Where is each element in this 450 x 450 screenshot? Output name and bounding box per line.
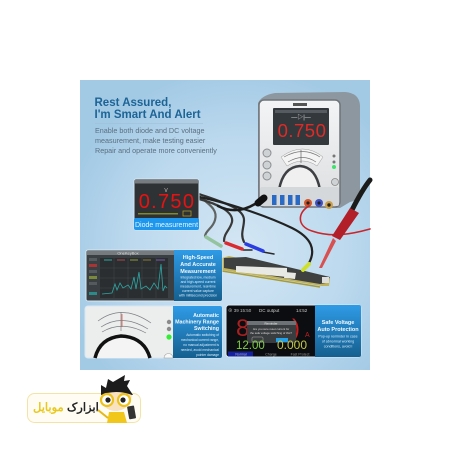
warning dialog: the safe voltage switching of this? xyxy=(250,331,292,335)
heading xyxy=(94,97,201,121)
card: high-speed measurement: High-Speed xyxy=(183,255,213,261)
card: safe voltage protection: conditions, avoid l xyxy=(324,344,352,348)
card: automatic range switching: needed, avoid mechanical xyxy=(181,348,219,352)
warning dialog: Are you sure reset current for xyxy=(253,327,289,331)
red clip xyxy=(226,243,242,249)
card: high-speed measurement: And Accurate xyxy=(180,262,216,268)
analog scale xyxy=(98,312,151,333)
card: safe voltage protection: Charge xyxy=(265,352,277,356)
reading: 0.750 xyxy=(139,191,195,213)
indicator lights xyxy=(332,154,338,186)
indicator lights xyxy=(166,320,172,340)
phone xyxy=(127,405,136,419)
mascot xyxy=(98,375,136,423)
display: —▷|— xyxy=(291,114,311,121)
card: automatic range switching: Automatic xyxy=(193,313,219,319)
card: automatic range switching: Machinery Range xyxy=(175,320,219,326)
heading: Rest Assured, xyxy=(94,97,171,109)
card: automatic range switching: pointer damage xyxy=(196,353,219,357)
text block: description xyxy=(95,126,217,155)
screen title: ⊕ 39 15:50 xyxy=(228,308,252,313)
front port strip xyxy=(260,187,339,206)
brand label xyxy=(293,103,307,106)
blue clip xyxy=(246,244,263,251)
hair xyxy=(101,375,133,395)
main black cable xyxy=(199,197,312,263)
card: high-speed measurement: Integrated low, medium xyxy=(180,276,216,280)
card: high-speed measurement: Measurement xyxy=(180,269,216,275)
text block: description: Enable both diode and DC voltage xyxy=(95,126,204,135)
red needle xyxy=(121,314,123,327)
card: safe voltage protection: Pop-up reminder in case xyxy=(318,334,358,338)
caption strip xyxy=(134,218,199,230)
card: diode measurement: V xyxy=(164,188,168,194)
blue text panel xyxy=(315,305,361,357)
left knobs xyxy=(263,149,271,180)
face xyxy=(101,392,132,411)
display xyxy=(273,108,329,145)
black dial arch xyxy=(95,336,150,358)
current chart xyxy=(100,258,168,298)
terminals xyxy=(304,199,333,209)
card: safe voltage protection xyxy=(226,305,361,357)
card: safe voltage protection: 0.000 xyxy=(277,338,307,352)
card: safe voltage protection: of abnormal working xyxy=(322,340,354,344)
usb ports xyxy=(272,195,300,205)
warning dialog: Reminder xyxy=(264,322,278,326)
card: safe voltage protection: Auto Protection xyxy=(317,327,359,333)
device: multimeter power supply xyxy=(258,92,360,209)
display: 0.750 xyxy=(278,120,326,141)
card: high-speed measurement: and high-speed current xyxy=(181,280,215,284)
card: automatic range switching xyxy=(85,306,222,358)
text block: description: Repair and operate more conveniently xyxy=(95,146,217,155)
card: high-speed measurement: with millisecond precision xyxy=(179,294,217,298)
card: high-speed measurement: current value capture xyxy=(182,289,214,293)
card: safe voltage protection: DC output xyxy=(259,308,280,313)
logo: ابزارک موبایل: ابزارک xyxy=(67,401,99,415)
card: diode measurement xyxy=(134,179,199,230)
heading: I'm Smart And Alert xyxy=(94,109,201,121)
blue-clip cable xyxy=(199,194,244,242)
body xyxy=(107,412,127,423)
card: safe voltage protection: 14:52 xyxy=(296,308,308,313)
mode buttons xyxy=(228,352,253,356)
red-clip cable xyxy=(199,199,232,241)
logo: ابزارک موبایل xyxy=(28,375,140,423)
card: safe voltage protection: ) xyxy=(292,315,300,342)
plug cable xyxy=(218,204,255,210)
card: safe voltage protection: Safe Voltage xyxy=(322,320,354,326)
device side and top shell xyxy=(258,92,360,208)
device front face xyxy=(259,100,340,207)
card: safe voltage protection: Normal xyxy=(235,352,247,356)
card: high-speed measurement: measurement, real-time xyxy=(180,284,216,288)
card status bar xyxy=(135,180,198,184)
card: automatic range switching: no manual adjustment is xyxy=(183,343,219,347)
yellow clip xyxy=(303,264,309,270)
green clip xyxy=(206,237,221,246)
blue text panel xyxy=(173,306,222,358)
red probe xyxy=(319,208,359,268)
black probe cable xyxy=(352,180,370,210)
card: safe voltage protection: Fast Protect xyxy=(291,352,309,356)
plug xyxy=(258,198,264,203)
text block: description: measurement, make testing easier xyxy=(95,136,206,145)
knob xyxy=(164,354,173,358)
logo wordmark: موبایل xyxy=(33,401,64,415)
probe cables xyxy=(199,180,370,270)
panel: background xyxy=(80,80,370,370)
card: high-speed measurement xyxy=(86,250,222,301)
level bar xyxy=(138,213,178,214)
circuit board xyxy=(222,256,330,287)
readings: 12.00 xyxy=(236,340,265,352)
logo badge xyxy=(28,394,140,422)
chart status bar xyxy=(87,251,174,255)
card: automatic range switching: Switching xyxy=(194,326,219,332)
sidebar buttons xyxy=(89,258,97,295)
card: automatic range switching: Automatic switching of xyxy=(186,333,219,337)
clip tails xyxy=(243,250,274,254)
glasses xyxy=(101,394,113,406)
card: automatic range switching: mechanical current range, xyxy=(181,338,219,342)
analog gauge xyxy=(279,149,323,200)
blue text panel xyxy=(174,250,222,301)
card: diode measurement: Diode measurement xyxy=(135,222,198,229)
card: safe voltage protection: A xyxy=(305,332,310,339)
red lead loop xyxy=(300,206,370,235)
card: high-speed measurement: OneKeyBox xyxy=(117,250,139,256)
wrench arm xyxy=(98,410,108,418)
gray cable xyxy=(199,196,216,236)
warning dialog xyxy=(247,321,296,343)
red arcs: 8 xyxy=(236,315,249,342)
